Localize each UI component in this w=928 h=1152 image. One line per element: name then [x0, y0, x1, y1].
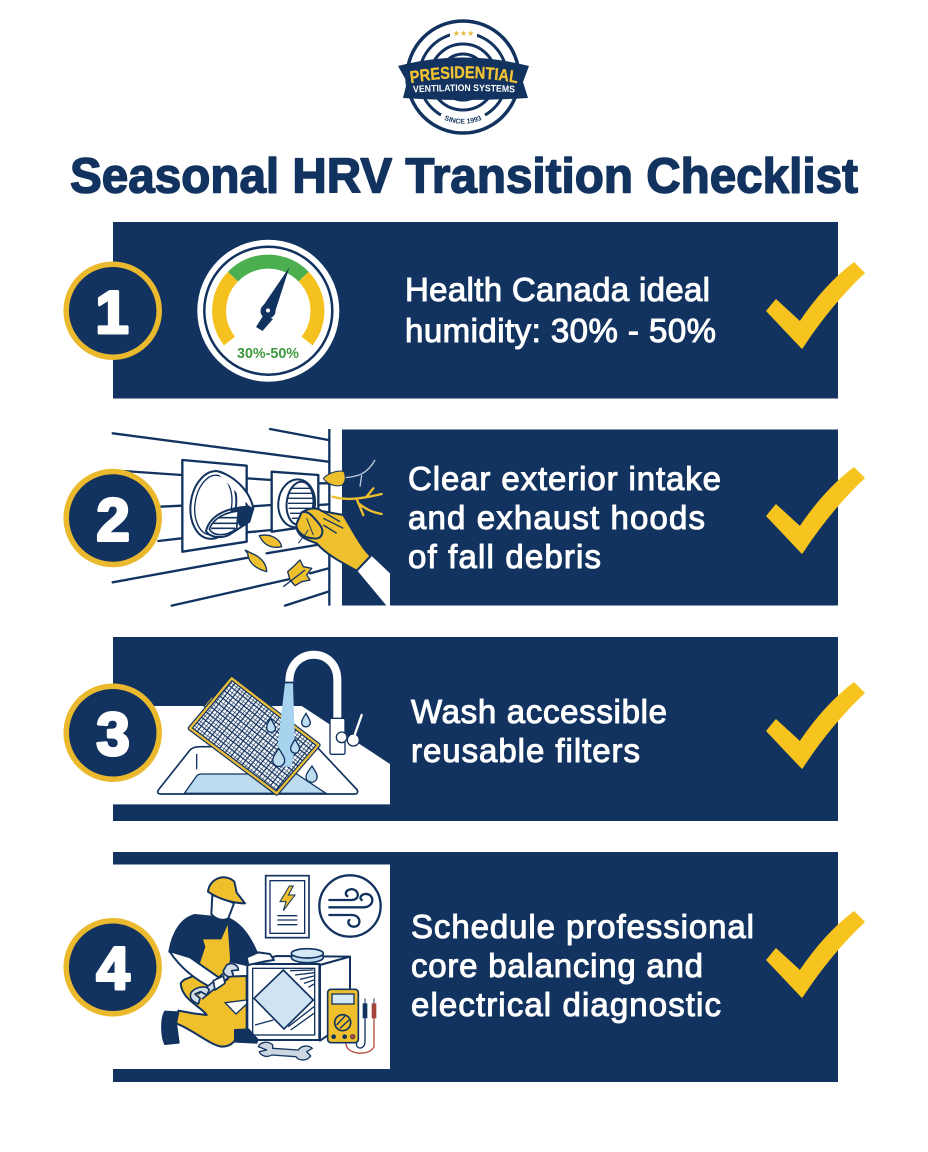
- logo: Presidential Ventilation Systems: SINCE 1993: [444, 116, 482, 124]
- icon: electrical panel: [266, 876, 309, 938]
- illustration: technician servicing HRV: [162, 875, 381, 1060]
- logo: Presidential Ventilation Systems: VENTILATION SYSTEMS: [412, 84, 515, 92]
- wrench: [258, 1042, 312, 1060]
- text: exterior hoods: of fall debris: [408, 538, 601, 575]
- number badge 4: 4: [96, 935, 130, 1002]
- check mark 4: [767, 912, 864, 997]
- icon: airflow: [319, 875, 381, 937]
- icon: humidity gauge: 30%-50%: [237, 346, 299, 362]
- number badge 2: 2: [96, 486, 130, 554]
- title: Seasonal HRV Transition Checklist: [70, 150, 858, 204]
- logo: Presidential Ventilation Systems: [398, 19, 529, 135]
- technician figure: [162, 877, 274, 1047]
- text: humidity: Health Canada ideal: [405, 271, 710, 308]
- panel: step 3 wash filters: [66, 637, 864, 821]
- check mark 2: [767, 468, 864, 553]
- check mark 1: [767, 263, 864, 348]
- number badge 4: [66, 921, 159, 1014]
- logo: Presidential Ventilation Systems: ★★★: [453, 29, 474, 38]
- icon: humidity gauge: [197, 240, 339, 382]
- illustration: exterior hoods and debris: [113, 429, 390, 607]
- text: wash filters: Wash accessible: [411, 693, 667, 730]
- text: wash filters: reusable filters: [411, 732, 640, 769]
- number badge 2: [66, 472, 159, 564]
- number badge 3: [66, 686, 159, 779]
- panel: step 2 exterior hoods: [66, 429, 864, 607]
- multimeter: [328, 989, 376, 1053]
- text: professional service: Schedule professional: [411, 908, 754, 945]
- logo: Presidential Ventilation Systems: PRESIDENTIAL: [410, 66, 518, 84]
- number badge 1: 1: [95, 279, 129, 346]
- illustration: filter under faucet in sink: [113, 655, 390, 804]
- panel: step 1 humidity: [66, 222, 864, 398]
- hand wrench: [190, 964, 238, 1004]
- text: humidity: humidity: 30% - 50%: [405, 312, 716, 349]
- number badge 1: [66, 264, 159, 357]
- text: professional service: electrical diagnostic: [411, 986, 721, 1023]
- HRV unit: [247, 949, 350, 1041]
- text: exterior hoods: Clear exterior intake: [408, 460, 721, 497]
- text: exterior hoods: and exhaust hoods: [408, 499, 705, 536]
- number badge 3: 3: [96, 701, 130, 768]
- text: professional service: core balancing and: [411, 947, 703, 984]
- panel: step 4 professional service: [66, 852, 864, 1082]
- check mark 3: [767, 683, 864, 768]
